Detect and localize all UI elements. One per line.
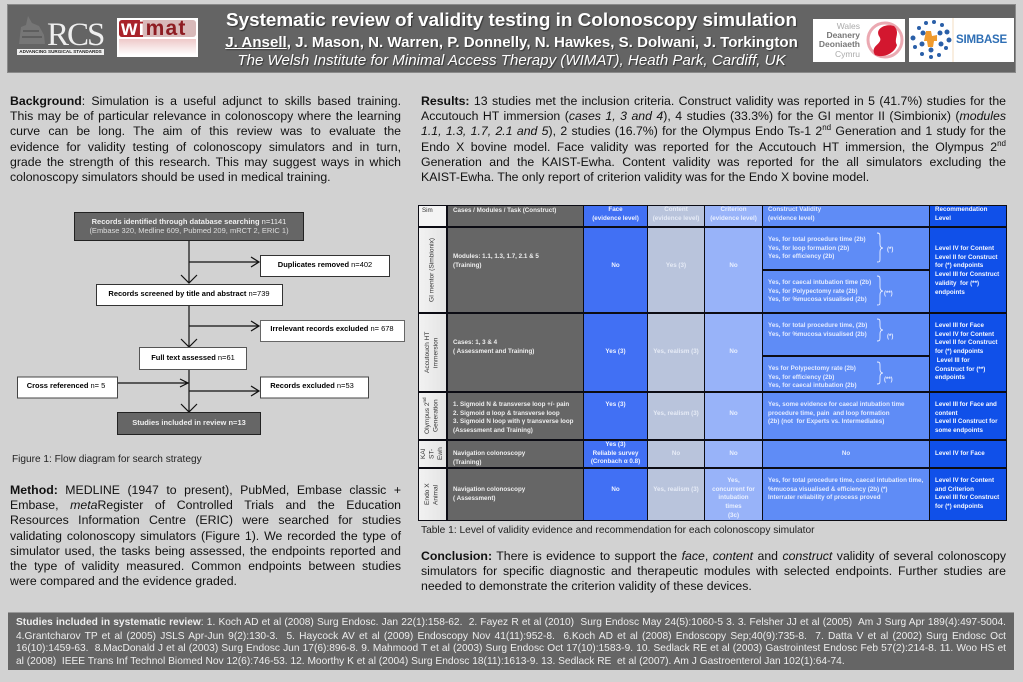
row: Endo X: No bbox=[611, 486, 620, 493]
row: GI mentor: Yes, for Polypectomy rate (2b) bbox=[768, 288, 858, 295]
text block: method: were compared and the evidence graded. bbox=[10, 574, 237, 588]
table header row: Sim bbox=[422, 207, 433, 214]
row: Olympus 2nd Generation bbox=[419, 393, 1006, 439]
box: records screened bbox=[96, 284, 282, 306]
row: Endo X: intubation bbox=[718, 494, 749, 501]
table header row: Level bbox=[935, 215, 951, 222]
title: Systematic review of validity testing in Colonoscopy simulation bbox=[226, 10, 797, 31]
text block: method: validating colonoscopy simulators (Figure 1). We recorded the type of bbox=[10, 529, 401, 543]
text block: conclusion bbox=[421, 549, 1006, 593]
row: KAIST-Ewha: Reliable survey bbox=[593, 450, 638, 457]
row: Endo X bbox=[419, 469, 1006, 520]
table header row: (evidence level) bbox=[592, 215, 639, 222]
references panel: 16(10):1459-63. 8.MacDonald J et al (2003) Surg Endosc Jun 17(6):896-8. 9. Mahmood T et al (2003) Surg Endosc Oct 17(10):1583-9. 10. Sedlack RE et al (2003) Gastrointest Endosc Feb 57(2):214-8. 11. Woo HS et bbox=[16, 643, 1006, 654]
box: irrelevant records excluded bbox=[260, 320, 404, 342]
row: KAIST-Ewha: KAI bbox=[420, 449, 427, 459]
box: full text assessed: Full text assessed n=61 bbox=[151, 353, 235, 362]
row: Endo X: ( Assessment) bbox=[453, 495, 496, 502]
box: records screened: Records screened by title and abstract n=739 bbox=[108, 289, 270, 298]
row: Accutouch HT: Cases: 1, 3 & 4 bbox=[453, 339, 497, 346]
row: KAIST-Ewha: ST- bbox=[428, 449, 435, 459]
box: records excluded: Records excluded n=53 bbox=[270, 381, 354, 390]
row: Accutouch HT: Level III for Face bbox=[935, 322, 984, 329]
text block: method: the type of validity measured. Common endpoints between studies bbox=[10, 559, 401, 573]
table header row: Face bbox=[608, 206, 623, 213]
table header row: Cases / Modules / Task (Construct) bbox=[453, 207, 556, 214]
logo: SIMBASE: SIMBASE bbox=[956, 34, 1007, 46]
box: duplicates removed bbox=[260, 256, 390, 276]
row: Olympus 2nd Generation: 1. Sigmoid N & transverse loop +/- pain bbox=[453, 401, 569, 408]
text block: conclusion: simulators for specific diagnostic and therapeutic modules with selected endpoints. Further studies are bbox=[421, 564, 1006, 578]
text block: results: KAIST-Ewha. The only report of criterion validity was for the Endo X bovine model. bbox=[421, 170, 869, 184]
box: duplicates removed: Duplicates removed n=402 bbox=[278, 260, 372, 269]
row: Endo X: Navigation colonoscopy bbox=[453, 486, 525, 493]
text block: background: curve can be long. The aim of this review was to evaluate the bbox=[10, 124, 401, 138]
row: Accutouch HT: Yes, realism (3) bbox=[653, 348, 699, 355]
row: Endo X: Endo X bbox=[424, 484, 431, 505]
row: GI mentor: (Training) bbox=[453, 262, 481, 269]
text block: results bbox=[421, 94, 1006, 184]
row: KAIST-Ewha: No bbox=[842, 450, 850, 457]
box: records identified bbox=[74, 212, 304, 240]
references panel: 4.Grantcharov TP et al (2005) JSLS Apr-Jun 9(2):130-3. 5. Haycock AV et al (2009) Endoscopy Nov 41(11):952-8. 6.Koch AD et al (2008) Endoscopy Sep;40(9):735-8. 7. Datta V et al (2002) Surg Endosc Oct bbox=[16, 630, 1006, 642]
text block: results: 1.1, 1.3, 1.7, 2.1 and 5), 2 studies (16.7%) for the Olympus Endo Ts-1 2nd Generation and 1 study for the bbox=[421, 123, 1006, 138]
row: GI mentor: Modules: 1.1, 1.3, 1.7, 2.1 & 5 bbox=[453, 253, 539, 260]
row: GI mentor: Yes (3) bbox=[666, 262, 686, 269]
text block: method: Method: MEDLINE (1947 to present), PubMed, Embase classic + bbox=[10, 483, 401, 497]
header banner bbox=[7, 4, 1016, 73]
box: full text assessed bbox=[140, 348, 246, 370]
text block: results: Results: 13 studies met the inclusion criteria. Construct validity was reported in 5 (41.7%) studies for the bbox=[421, 94, 1006, 108]
logo: RCS bbox=[17, 16, 104, 55]
references panel: al (2008) IEEE Trans Inf Technol Biomed Nov 12(6):746-53. 12. Moorthy K et al (2004) Surg Endosc 18(11):1613-9. 13. Sedlack RE et al (2007). Am J Gastroenterol Jan 102(1):64-74. bbox=[16, 656, 845, 666]
row: Olympus 2nd Generation: Olympus 2nd bbox=[422, 398, 431, 434]
affiliation: The Welsh Institute for Minimal Access Therapy (WIMAT), Heath Park, Cardiff, UK bbox=[237, 52, 786, 69]
row: Accutouch HT: for (*) endpoints bbox=[935, 348, 983, 355]
row: KAIST-Ewha bbox=[419, 441, 1006, 467]
row: Olympus 2nd Generation: (Assessment and Training) bbox=[453, 427, 533, 434]
row: Olympus 2nd Generation: No bbox=[729, 410, 738, 417]
logo: SIMBASE bbox=[909, 18, 1014, 62]
row: Accutouch HT: Accutouch HT bbox=[424, 332, 431, 373]
row: Endo X: Interrater reliability of process proved bbox=[768, 494, 881, 501]
row: GI mentor: GI mentor (Simbionix) bbox=[428, 238, 435, 302]
row: Accutouch HT: Construct for (**) bbox=[935, 366, 985, 373]
row: KAIST-Ewha: No bbox=[672, 450, 680, 457]
references panel bbox=[8, 612, 1014, 670]
table header row: (evidence level) bbox=[653, 215, 699, 222]
row: Accutouch HT: endpoints bbox=[935, 374, 965, 381]
row: Accutouch HT: Yes (3) bbox=[605, 348, 626, 355]
box: cross referenced: Cross referenced n= 5 bbox=[27, 381, 105, 390]
row: GI mentor: Yes, for loop formation (2b) bbox=[768, 245, 849, 252]
logo: RCS: RCS bbox=[47, 17, 103, 53]
row: Endo X: Animal bbox=[432, 484, 440, 505]
row: KAIST-Ewha: Level IV for Face bbox=[935, 450, 985, 457]
row: Olympus 2nd Generation: Yes, realism (3) bbox=[653, 410, 699, 417]
row: KAIST-Ewha: (Training) bbox=[453, 459, 481, 466]
row: Olympus 2nd Generation: Level II Construct for bbox=[935, 418, 998, 425]
row: GI mentor: Yes, for efficiency (2b) bbox=[768, 253, 834, 260]
row: GI mentor: No bbox=[611, 262, 620, 269]
logo: Wales Deanery: Wales bbox=[837, 21, 860, 31]
text block: background: evidence for validity testing of colonoscopy simulators and in turn, bbox=[10, 140, 401, 154]
row: Endo X: (3c) bbox=[728, 512, 739, 519]
row: GI mentor: Yes, for total procedure time (2b) bbox=[768, 236, 866, 243]
row: GI mentor: No bbox=[729, 262, 738, 269]
table header row: Content bbox=[664, 206, 688, 213]
row: KAIST-Ewha: No bbox=[729, 450, 738, 457]
logo: Wales Deanery: Deanery bbox=[826, 30, 860, 40]
braces and endpoint markers bbox=[877, 232, 894, 384]
row: GI mentor: Level III for Construct bbox=[935, 271, 999, 278]
row: Accutouch HT: immersion bbox=[432, 337, 440, 368]
box: irrelevant records excluded: Irrelevant records excluded n= 678 bbox=[270, 324, 394, 333]
row: Accutouch HT: Level IV for Content bbox=[935, 331, 994, 338]
text block: method bbox=[10, 483, 402, 588]
flow arrows bbox=[117, 240, 259, 412]
row: Endo X: Yes, for total procedure time, caecal intubation time, bbox=[768, 477, 923, 484]
row: GI mentor: validity for (**) bbox=[935, 280, 979, 287]
row: GI mentor: Level II for Construct bbox=[935, 254, 998, 261]
table header row bbox=[419, 206, 1006, 226]
text block: background: This may be of particular relevance in colonoscopy where the learning bbox=[10, 109, 401, 123]
box: records identified: (Embase 320, Medline 609, Pubmed 209, mRCT 2, ERIC 1) bbox=[89, 226, 289, 235]
text block: background: grade the strength of this research. This may suggest ways in which bbox=[10, 155, 401, 169]
table header row: (evidence level) bbox=[710, 215, 757, 222]
row: Endo X: concurrent for bbox=[712, 486, 755, 493]
row: Olympus 2nd Generation: some endpoints bbox=[935, 427, 983, 434]
row: Olympus 2nd Generation: Level III for Face and bbox=[935, 401, 997, 408]
box: records excluded bbox=[260, 377, 368, 398]
row: GI mentor bbox=[419, 228, 1006, 312]
authors: J. Ansell, J. Mason, N. Warren, P. Donnelly, N. Hawkes, S. Dolwani, J. Torkington bbox=[225, 34, 798, 51]
row: GI mentor: Level IV for Content bbox=[935, 245, 994, 252]
row: KAIST-Ewha: Navigation colonoscopy bbox=[453, 450, 525, 457]
row: Endo X: times bbox=[725, 503, 742, 510]
row: Endo X: Level IV for Content bbox=[935, 477, 994, 484]
text block: method: Resources Information Centre (ERIC) were searched for studies bbox=[10, 513, 401, 527]
figure caption: Figure 1: Flow diagram for search strategy bbox=[12, 454, 202, 465]
row: Accutouch HT: No bbox=[729, 348, 738, 355]
row: Endo X: %mucosa visualised & efficiency (2b) (*) bbox=[768, 486, 887, 493]
row: KAIST-Ewha: Ewh bbox=[437, 448, 444, 460]
row: Endo X: Level III for Construct bbox=[935, 494, 999, 501]
text block: conclusion: needed to demonstrate the criterion validity of these devices. bbox=[421, 579, 752, 593]
row: Endo X: and Criterion bbox=[935, 486, 974, 493]
row: GI mentor: for (*) endpoints bbox=[935, 262, 983, 269]
braces and endpoint markers: (*) bbox=[887, 247, 893, 253]
row: Accutouch HT: Level II for Construct bbox=[935, 339, 998, 346]
flow diagram bbox=[17, 212, 405, 435]
text block: method: simulator used, the tasks being assessed, the endpoints reported and bbox=[10, 544, 401, 558]
row: Olympus 2nd Generation: Yes (3) bbox=[605, 401, 626, 408]
row: Accutouch HT: Yes, for %mucosa visualised (2b) bbox=[768, 331, 867, 338]
row: Accutouch HT: Yes for Polypectomy rate (2b) bbox=[768, 365, 856, 372]
text block: background bbox=[10, 94, 401, 184]
logo: Wales Deanery bbox=[813, 19, 905, 62]
text block: results: Accutouch HT immersion (cases 1, 3 and 4), 4 studies (33.3%) for the GI mentor II (Simbionix) (modules bbox=[421, 109, 1006, 123]
text block: background: Background: Simulation is a useful adjunct to skills based training. bbox=[10, 94, 401, 108]
row: GI mentor: endpoints bbox=[935, 289, 965, 296]
text block: results: Generation and the KAIST-Ewha. Content validity was reported for the all simulators excluding the bbox=[421, 155, 1006, 169]
row: Olympus 2nd Generation: 2. Sigmoid α loop & transverse loop bbox=[453, 410, 560, 417]
logo: wimat bbox=[117, 18, 198, 57]
references panel: Studies included in systematic review: 1. Koch AD et al (2008) Surg Endosc. Jan 22(1):158-62. 2. Fayez R et al (2010) Surg Endosc May 24(5):1060-5 3. 3. Felsher JJ et al (2005) Am J Surg Apr 189(4):497-5004. bbox=[16, 617, 1006, 628]
row: KAIST-Ewha: (Cronbach α 0.8) bbox=[591, 458, 640, 465]
row: Accutouch HT: Level III for bbox=[937, 357, 970, 364]
row: GI mentor: Yes, for %mucosa visualised (2b) bbox=[768, 296, 867, 303]
table header row: (evidence level) bbox=[768, 215, 815, 222]
braces and endpoint markers: (**) bbox=[884, 291, 893, 297]
row: Olympus 2nd Generation: 3. Sigmoid N loop with γ transverse loop bbox=[453, 418, 574, 425]
logo: Wales Deanery: Deoniaeth bbox=[819, 39, 860, 49]
row: Accutouch HT: Yes, for efficiency (2b) bbox=[768, 374, 834, 381]
table caption: Table 1: Level of validity evidence and recommendation for each colonoscopy simulator bbox=[421, 525, 815, 536]
row: Accutouch HT: Yes, for caecal intubation (2b) bbox=[768, 382, 857, 389]
row: Endo X: Yes, bbox=[727, 477, 740, 484]
row: Endo X: for (*) endpoints bbox=[935, 503, 983, 510]
row: Accutouch HT bbox=[419, 314, 1006, 391]
braces and endpoint markers: (**) bbox=[884, 377, 893, 383]
box: studies included bbox=[118, 412, 260, 434]
box: cross referenced bbox=[18, 377, 118, 398]
row: KAIST-Ewha: Yes (3) bbox=[605, 441, 626, 448]
text block: conclusion: Conclusion: There is evidence to support the face, content and construct validity of several colonoscopy bbox=[421, 549, 1006, 563]
row: Olympus 2nd Generation: Generation bbox=[432, 400, 440, 432]
table header row: Recommendation bbox=[935, 206, 987, 213]
text block: method: Embase, metaRegister of Controlled Trials and the Education bbox=[10, 498, 401, 512]
table header row: Construct Validity bbox=[768, 206, 821, 213]
logo: Wales Deanery: Cymru bbox=[835, 49, 860, 59]
text block: results: Endo X bovine model. Face validity was reported for the Accutouch HT immersion, the Olympus 2nd bbox=[421, 138, 1006, 154]
row: Endo X: Yes, realism (3) bbox=[653, 486, 699, 493]
row: Olympus 2nd Generation: (2b) (not for Experts vs. Intermediates) bbox=[768, 418, 884, 425]
row: Olympus 2nd Generation: Yes, some evidence for caecal intubation time bbox=[768, 401, 905, 408]
logo: RCS: ADVANCING SURGICAL STANDARDS bbox=[19, 49, 102, 54]
row: GI mentor: Yes, for caecal intubation time (2b) bbox=[768, 279, 871, 286]
box: records identified: Records identified through database searching n=1141 bbox=[92, 217, 286, 226]
row: Olympus 2nd Generation: content bbox=[935, 410, 958, 417]
row: Accutouch HT: Yes, for total procedure time, (2b) bbox=[768, 322, 867, 329]
row: Accutouch HT: ( Assessment and Training) bbox=[453, 348, 534, 355]
text block: background: colonoscopy simulators should be used in medical training. bbox=[10, 170, 331, 184]
row: Olympus 2nd Generation: procedure time, pain and loop formation bbox=[768, 410, 890, 417]
table: validity evidence bbox=[418, 205, 1007, 521]
braces and endpoint markers: (*) bbox=[887, 334, 893, 340]
box: studies included: Studies included in review n=13 bbox=[132, 418, 246, 427]
table header row: Criterion bbox=[720, 206, 747, 213]
